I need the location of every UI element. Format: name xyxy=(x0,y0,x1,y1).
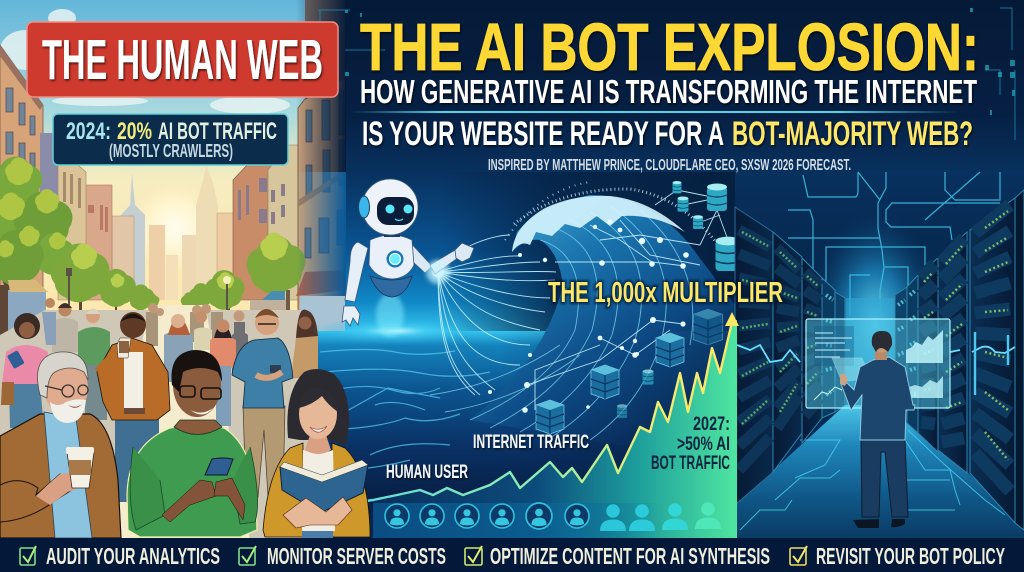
dashboard chart xyxy=(906,330,943,363)
checklist item: monitor xyxy=(239,543,446,569)
callout: 1,000x multiplier: THE 1,000x MULTIPLIER xyxy=(548,277,783,309)
label: 2027 forecast xyxy=(651,414,730,474)
ocean xyxy=(318,331,738,540)
building: right brick and cream xyxy=(233,145,300,300)
checklist item: audit: AUDIT YOUR ANALYTICS xyxy=(46,543,220,569)
robot head xyxy=(358,179,418,235)
network nodes xyxy=(432,219,689,413)
circuit decoration xyxy=(318,8,1015,140)
callout: 2024 statistic: (MOSTLY CRAWLERS) xyxy=(109,141,233,161)
ceiling circuit traces xyxy=(788,172,1000,316)
action checklist bar xyxy=(0,538,1024,572)
chart trend line xyxy=(345,322,732,504)
traffic growth chart xyxy=(345,312,739,539)
building: tall foreground facade xyxy=(298,0,360,336)
left rack rows xyxy=(739,230,820,470)
robot chest core xyxy=(386,250,404,268)
awnings and shopfronts xyxy=(8,270,346,350)
far city skyline xyxy=(84,165,239,305)
database icons lower wave xyxy=(536,309,723,434)
room backdrop xyxy=(735,172,1024,540)
database icons top right xyxy=(672,181,740,271)
horizon glow xyxy=(310,317,480,345)
label: 2027 forecast: >50% AI xyxy=(677,434,730,455)
rack pulse lines xyxy=(737,332,1015,395)
sidewalk xyxy=(0,310,320,540)
crowd: distant people xyxy=(42,298,321,426)
panel: server room xyxy=(735,172,1024,540)
robot right arm xyxy=(402,240,474,274)
label: 2027 forecast: 2027: xyxy=(693,414,730,435)
building: left brick xyxy=(0,45,108,300)
label: human user: HUMAN USER xyxy=(386,462,468,483)
user icons: solid xyxy=(600,502,721,531)
robot left arm xyxy=(342,242,368,326)
robot torso xyxy=(369,235,414,279)
person: man with coffee in brown jacket xyxy=(97,312,170,502)
callout: 2024 statistic xyxy=(53,114,288,165)
robot xyxy=(342,179,474,326)
wave crest spray xyxy=(505,182,730,262)
ocean ripples xyxy=(320,350,490,470)
checklist item: audit xyxy=(20,543,220,569)
back wall glow column xyxy=(846,298,895,410)
right rack rows xyxy=(921,205,1010,491)
hand glow xyxy=(426,260,450,284)
person: older man with coffee and cardigan xyxy=(0,352,121,538)
floor xyxy=(735,405,1024,540)
street lamps xyxy=(66,268,231,312)
panel: human web street scene xyxy=(0,0,360,540)
label: 2027 forecast: BOT TRAFFIC xyxy=(651,453,730,474)
header background xyxy=(345,0,1024,172)
person: man in green sweater using phone xyxy=(127,350,258,537)
tree row xyxy=(51,233,305,340)
callout: 2024 statistic: AI BOT TRAFFIC xyxy=(158,118,277,145)
checklist item: monitor: MONITOR SERVER COSTS xyxy=(267,543,446,569)
person: man in blue sweater with phone xyxy=(232,309,293,497)
wave body xyxy=(470,195,735,450)
label: internet traffic: INTERNET TRAFFIC xyxy=(473,432,589,453)
businessman from behind xyxy=(840,331,915,528)
data streams from robot hand xyxy=(438,190,728,410)
person: woman with afro and pink top xyxy=(1,313,48,428)
wave hollow streaks xyxy=(430,206,693,440)
floor circuit traces xyxy=(740,430,1005,530)
panel: AI bot wave scene xyxy=(296,0,1024,540)
holographic dashboard xyxy=(806,319,950,408)
sky clouds xyxy=(0,9,290,114)
callout: 1,000x multiplier: THE 1,000x MULTIPLIER xyxy=(548,277,783,309)
callout: 2024 statistic: 20% xyxy=(117,118,152,145)
callout: 2024 statistic: 2024: xyxy=(66,118,111,145)
chart area xyxy=(373,320,737,539)
banner: the human web: THE HUMAN WEB xyxy=(42,28,323,92)
left server racks xyxy=(735,207,845,505)
chart arrowhead xyxy=(725,312,739,326)
checklist item: optimize xyxy=(465,543,770,569)
checklist item: optimize: OPTIMIZE CONTENT FOR AI SYNTHESIS xyxy=(490,543,770,569)
user icons: outlined xyxy=(385,503,589,529)
right server racks xyxy=(895,190,1024,530)
person: woman reading a book xyxy=(263,369,370,538)
banner: the human web xyxy=(27,22,338,97)
question line: IS YOUR WEBSITE READY FOR A xyxy=(362,115,724,153)
tree: left large xyxy=(0,157,74,355)
sun glow xyxy=(127,180,223,276)
